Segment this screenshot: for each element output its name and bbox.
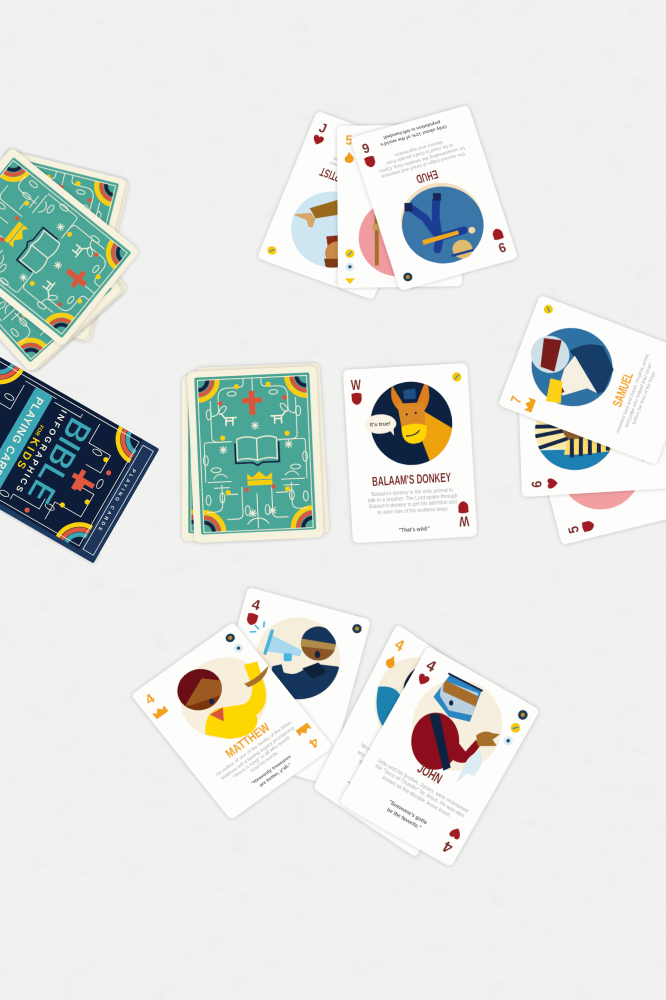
product box (0, 357, 159, 564)
illustration: Samuel (530, 327, 614, 407)
card: Pharaoh six: Plagues came to his land. (651, 400, 659, 456)
box subtitle: INFOGRAPHICS (14, 408, 69, 494)
card: Matthew: "Jesus is King" to all who would (232, 735, 292, 780)
card: Balaam's Donkey: BALAAM'S DONKEY (372, 469, 452, 489)
card: Samuel: SAMUEL (610, 370, 636, 409)
card: Ehud: Only about 12% of the world's (379, 123, 447, 147)
card: John: 4 (423, 657, 439, 677)
card: Balaam's Donkey: Balaam's donkey to get his attention and (369, 499, 457, 510)
card: John: the "Sons of Thunder" by Jesus. He was also (374, 764, 465, 820)
card: Ehud: for assassinating the Moabite king, Eglon, (377, 144, 465, 174)
card: flame four: "Trust me (346, 781, 368, 799)
card: Matthew: MATTHEW (223, 721, 273, 761)
card: John: known as the disciple Jesus loved. (381, 775, 452, 819)
card: flame four: 4 (392, 636, 407, 656)
card: Matthew: "Heavenly treasures (250, 754, 293, 786)
speech bubble: It's true! (370, 421, 391, 429)
product box: PLAYING CARDS (96, 467, 137, 532)
card: orange five: 5 (446, 263, 453, 279)
card: flame four (313, 624, 500, 857)
box for kids: KIDS (14, 435, 42, 470)
card: Pharaoh six (517, 412, 666, 498)
card: orange five: 5 (346, 133, 353, 149)
card: John the Baptist: and baptized as a prophet (332, 155, 388, 180)
card: John the Baptist (256, 110, 380, 300)
card: orange five (337, 124, 462, 288)
illustration: John (411, 673, 503, 783)
card: Samuel: and judge who helped lead Israel (624, 363, 654, 428)
card: Ehud: population is left-handed! (382, 119, 441, 140)
box banner playing cards (0, 387, 53, 494)
left pile of card backs (0, 134, 154, 386)
card index: W (350, 377, 362, 394)
card: John (338, 634, 549, 868)
card: John the Baptist: JOHN THE BAPTIST (318, 165, 390, 202)
card: Matthew (129, 615, 339, 820)
card: Matthew: read his words. (250, 750, 280, 774)
card: Matthew: 4 (142, 691, 158, 708)
card: John the Baptist: Preached about repentance (329, 160, 388, 186)
box cross icon (67, 466, 98, 498)
card: John: be the favorite." (386, 807, 423, 832)
card: Balaam's Donkey: to warn him of his reckless ways. (377, 506, 449, 516)
card: John the Baptist: preparing for the Messiah (335, 150, 390, 174)
card: John the Baptist: J (317, 119, 329, 136)
card: Samuel: 7 (507, 393, 525, 406)
speech bubble (364, 414, 397, 437)
card: Balaam's Donkey: Balaam's donkey is the only animal to (371, 487, 454, 498)
card: Ehud: slavery and oppression. (392, 139, 443, 158)
card index: J (361, 275, 373, 291)
illustration: Matthew (173, 655, 268, 742)
card: Ehud: 9 (496, 239, 508, 256)
card: John: John and his brother, James, were nicknamed (376, 758, 469, 815)
card: Samuel: before the time of the kings. (631, 370, 657, 425)
card: Matthew: An author of one of the books of the Bible, (215, 720, 294, 778)
box for kids (14, 423, 49, 470)
card: Samuel: Anointed Saul and David. Prophet, priest, (615, 353, 651, 434)
card: Matthew: 4 (306, 734, 322, 751)
illustration: donkey (370, 381, 452, 466)
card: Ehud (350, 105, 518, 291)
card index (359, 265, 379, 292)
card: Pharaoh six: 6 (529, 480, 546, 488)
card: John: "Someone's gotta (387, 800, 428, 826)
card: John the Baptist: and the coming of Jesus. (338, 145, 391, 169)
box title BIBLE: BIBLE (20, 411, 99, 510)
card: red five: 5 (566, 524, 583, 535)
card: Balaam's Donkey: W (458, 512, 470, 529)
card: Ehud: to be cruel to God's people from (386, 142, 454, 166)
card: prophet with megaphone (236, 586, 372, 783)
card: Pharaoh six: We chose to keep them all (645, 400, 653, 457)
card: prophet with megaphone: 4 (250, 597, 263, 615)
card: Matthew: are better, y'all." (258, 762, 293, 789)
card: Pharaoh six: PHARAOH (619, 407, 636, 452)
card: flame four: is ours. (365, 773, 381, 788)
card: John: 4 (440, 837, 456, 856)
card: flame four: Wrote more books of the (360, 742, 407, 778)
card: Ehud: The second judge of Israel and infamous (380, 150, 466, 179)
card: Ehud: EHUD (414, 167, 440, 186)
card: Ehud: 9 (360, 140, 372, 157)
card: red five (531, 384, 666, 545)
center stack of card backs (173, 355, 334, 553)
card: Matthew: Matthew left a lasting legacy proclaiming (220, 725, 296, 781)
card: Balaam's Donkey: talk to a prophet. The Lord spoke through (368, 493, 458, 504)
card: flame four: any other biblical author, (356, 749, 403, 785)
card: John: JOHN (415, 761, 445, 787)
card: flame four: that all good things (358, 759, 395, 788)
card: Balaam's Donkey: "That's wild!" (399, 527, 431, 534)
card: Balaam's Donkey (343, 363, 477, 543)
card: Samuel (498, 295, 666, 465)
illustration: Ehud (400, 182, 485, 264)
icon: sound lines (250, 618, 265, 635)
card: Pharaoh six: Ruler of all Egypt when Moses (639, 395, 647, 461)
box for kids: FOR (33, 423, 44, 436)
card index (350, 377, 362, 405)
